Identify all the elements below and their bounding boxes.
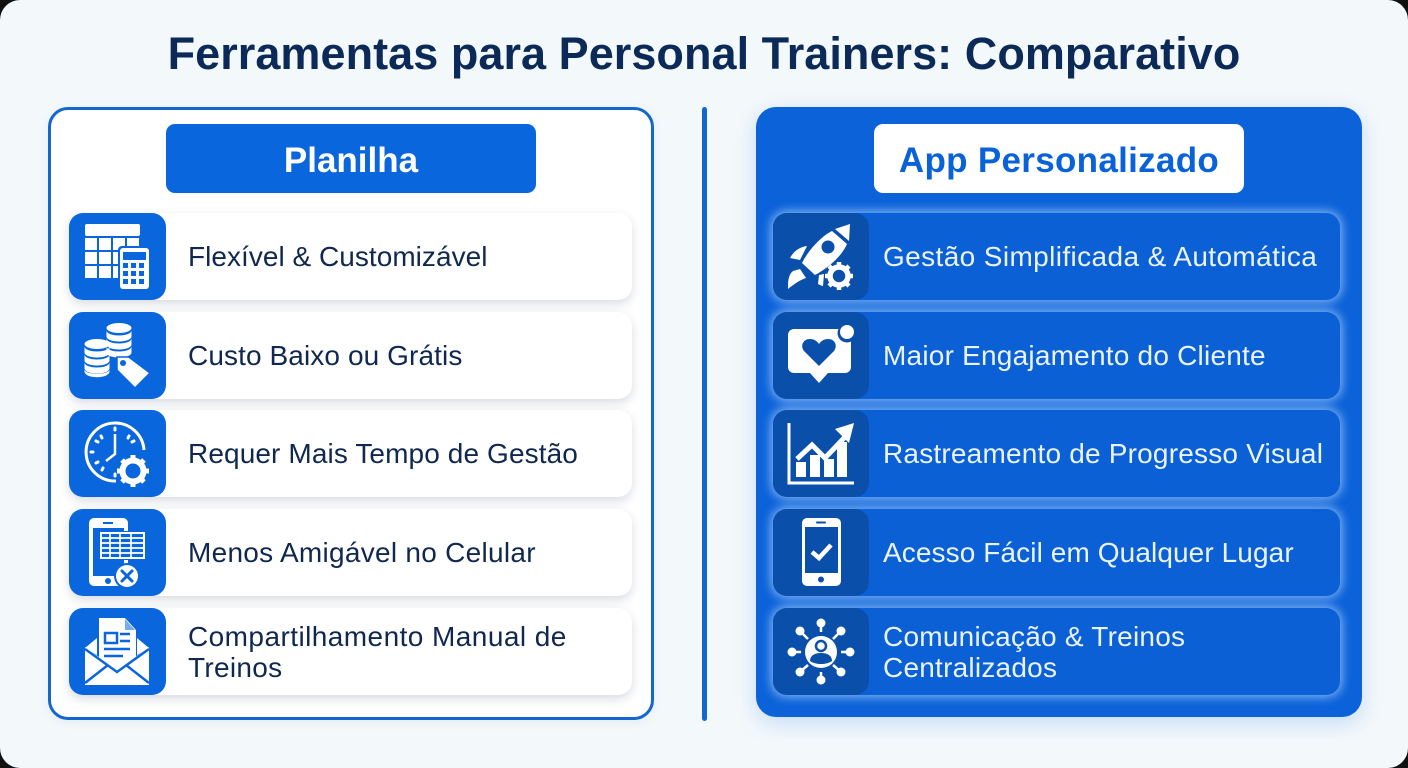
row: Menos Amigável no Celular [69, 509, 632, 596]
label: Rastreamento de Progresso Visual [883, 438, 1323, 469]
icon: rocket and gear [773, 213, 869, 300]
heading: App Personalizado [874, 124, 1244, 193]
icon: coins and price tag [69, 312, 166, 399]
panel: Planilha [48, 107, 654, 720]
label: Requer Mais Tempo de Gestão [188, 438, 578, 469]
row: Gestão Simplificada & Automática [773, 213, 1340, 300]
row: Comunicação & Treinos Centralizados [773, 608, 1340, 695]
heading: Planilha: Planilha [284, 141, 418, 180]
heading: Planilha [166, 124, 536, 193]
icon: clock and gear [69, 410, 166, 497]
label: Comunicação & Treinos [883, 620, 1185, 652]
icon: network around person [773, 608, 869, 695]
heading: App Personalizado: App Personalizado [899, 141, 1219, 180]
label: Custo Baixo ou Grátis [188, 340, 462, 371]
divider [702, 107, 707, 721]
label [188, 620, 567, 682]
row: Acesso Fácil em Qualquer Lugar [773, 509, 1340, 596]
row: Custo Baixo ou Grátis [69, 312, 632, 399]
row: Compartilhamento Manual de Treinos [69, 608, 632, 695]
label: Maior Engajamento do Cliente [883, 340, 1266, 371]
icon: envelope with document [69, 608, 166, 695]
panel: App Personalizado [756, 107, 1362, 717]
icon: spreadsheet and calculator [69, 213, 166, 300]
label: Treinos [188, 652, 282, 682]
row: Rastreamento de Progresso Visual [773, 410, 1340, 497]
label: Acesso Fácil em Qualquer Lugar [883, 537, 1294, 568]
icon: growth chart [773, 410, 869, 497]
row: Flexível & Customizável [69, 213, 632, 300]
row: Requer Mais Tempo de Gestão [69, 410, 632, 497]
label: Centralizados [883, 652, 1057, 682]
icon: heart message bubble [773, 312, 869, 399]
label: Menos Amigável no Celular [188, 537, 536, 568]
label [883, 620, 1185, 682]
title: Ferramentas para Personal Trainers: Comparativo [168, 28, 1240, 79]
label: Flexível & Customizável [188, 241, 487, 272]
label: Gestão Simplificada & Automática [883, 241, 1317, 272]
label: Compartilhamento Manual de [188, 620, 567, 652]
icon: phone with spreadsheet and x [69, 509, 166, 596]
icon: phone with check [773, 509, 869, 596]
row: Maior Engajamento do Cliente [773, 312, 1340, 399]
